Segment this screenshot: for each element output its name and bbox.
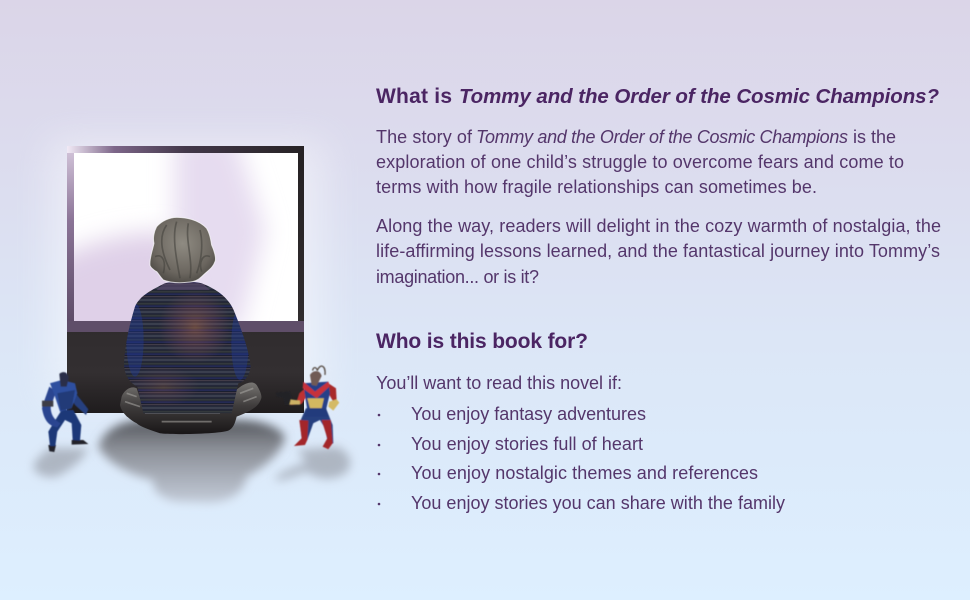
left toy wrist [42, 401, 53, 407]
left toy tail arm [42, 387, 61, 427]
hair strands [155, 222, 210, 278]
right toy forearm [289, 399, 300, 405]
right toy waist [305, 408, 328, 417]
right toy antennae [313, 366, 325, 375]
hair [150, 217, 216, 283]
screen [74, 153, 298, 321]
paragraph: along the way: imagination... or is it? [376, 267, 539, 287]
boy [120, 217, 261, 434]
right toy chest v [303, 382, 330, 398]
sweater lower warmth [136, 373, 191, 402]
sweater blue right [231, 307, 249, 380]
television glow [50, 140, 325, 400]
paragraph: story: terms with how fragile relationships can sometimes be. [376, 177, 817, 197]
right toy glove [328, 399, 339, 411]
left toy head [59, 372, 69, 387]
control ledge [67, 321, 304, 332]
screen tints [74, 153, 271, 321]
paragraph: along the way: life-affirming lessons learned, and the fantastical journey into Tommy’s [376, 241, 940, 261]
left toy right arm [70, 390, 88, 415]
crossed legs [120, 383, 261, 434]
bullet list: You enjoy stories you can share with the family [411, 493, 785, 513]
toy: blue robot [42, 372, 88, 452]
right toy legs [300, 408, 333, 445]
trouser highlights [125, 388, 257, 422]
bullet list: You enjoy stories full of heart [411, 434, 643, 454]
television set [67, 146, 304, 413]
right toy torso [303, 382, 330, 410]
lilac lower left [74, 222, 170, 321]
right toy shadow [275, 447, 350, 480]
paragraph: along the way [376, 216, 941, 287]
cabinet [67, 146, 304, 413]
left toy legs [48, 410, 81, 446]
boy's floor shadow [98, 420, 285, 503]
bullet list: You enjoy fantasy adventures [411, 404, 646, 424]
bullet list [378, 404, 785, 513]
sweater stripes [124, 282, 250, 414]
heading: what is: What is [376, 85, 452, 108]
right toy shoulder arm left [290, 388, 307, 405]
right toy head [310, 371, 322, 386]
heading: what is: Tommy and the Order of the Cosmic Champions? [459, 85, 939, 108]
paragraph: story: exploration of one child’s struggle to overcome fears and come to [376, 152, 904, 172]
toy: red and blue robot [276, 366, 339, 449]
paragraph: story: Tommy and the Order of the Cosmic Champions [476, 127, 848, 147]
right toy yellow belly [307, 398, 324, 408]
heading: who is this book for: Who is this book for? [376, 330, 588, 353]
sweater top purple [157, 282, 210, 290]
left toy torso [50, 380, 77, 412]
illustration: boy watching television with toys [33, 135, 350, 503]
left toy shadow [33, 448, 88, 477]
right toy red greaves [294, 420, 333, 449]
left frame [67, 153, 74, 321]
paragraph: story: is the [853, 127, 896, 147]
bullet list: You enjoy nostalgic themes and references [411, 463, 758, 483]
right toy right arm [328, 383, 337, 402]
left toy chest shade [57, 390, 75, 411]
intro line: You’ll want to read this novel if: [376, 373, 622, 393]
top frame [67, 146, 304, 153]
paragraph: story: The story of [376, 127, 473, 147]
right toy gun [276, 391, 292, 405]
sweater [124, 282, 250, 414]
sweater blue left [126, 303, 144, 377]
lilac band upper right [175, 135, 265, 330]
sweater warm centre [162, 295, 228, 358]
paragraph: along the way: Along the way, readers will delight in the cozy warmth of nostalgia, the [376, 216, 941, 236]
paragraph: story [376, 127, 904, 197]
left toy feet [48, 440, 88, 452]
